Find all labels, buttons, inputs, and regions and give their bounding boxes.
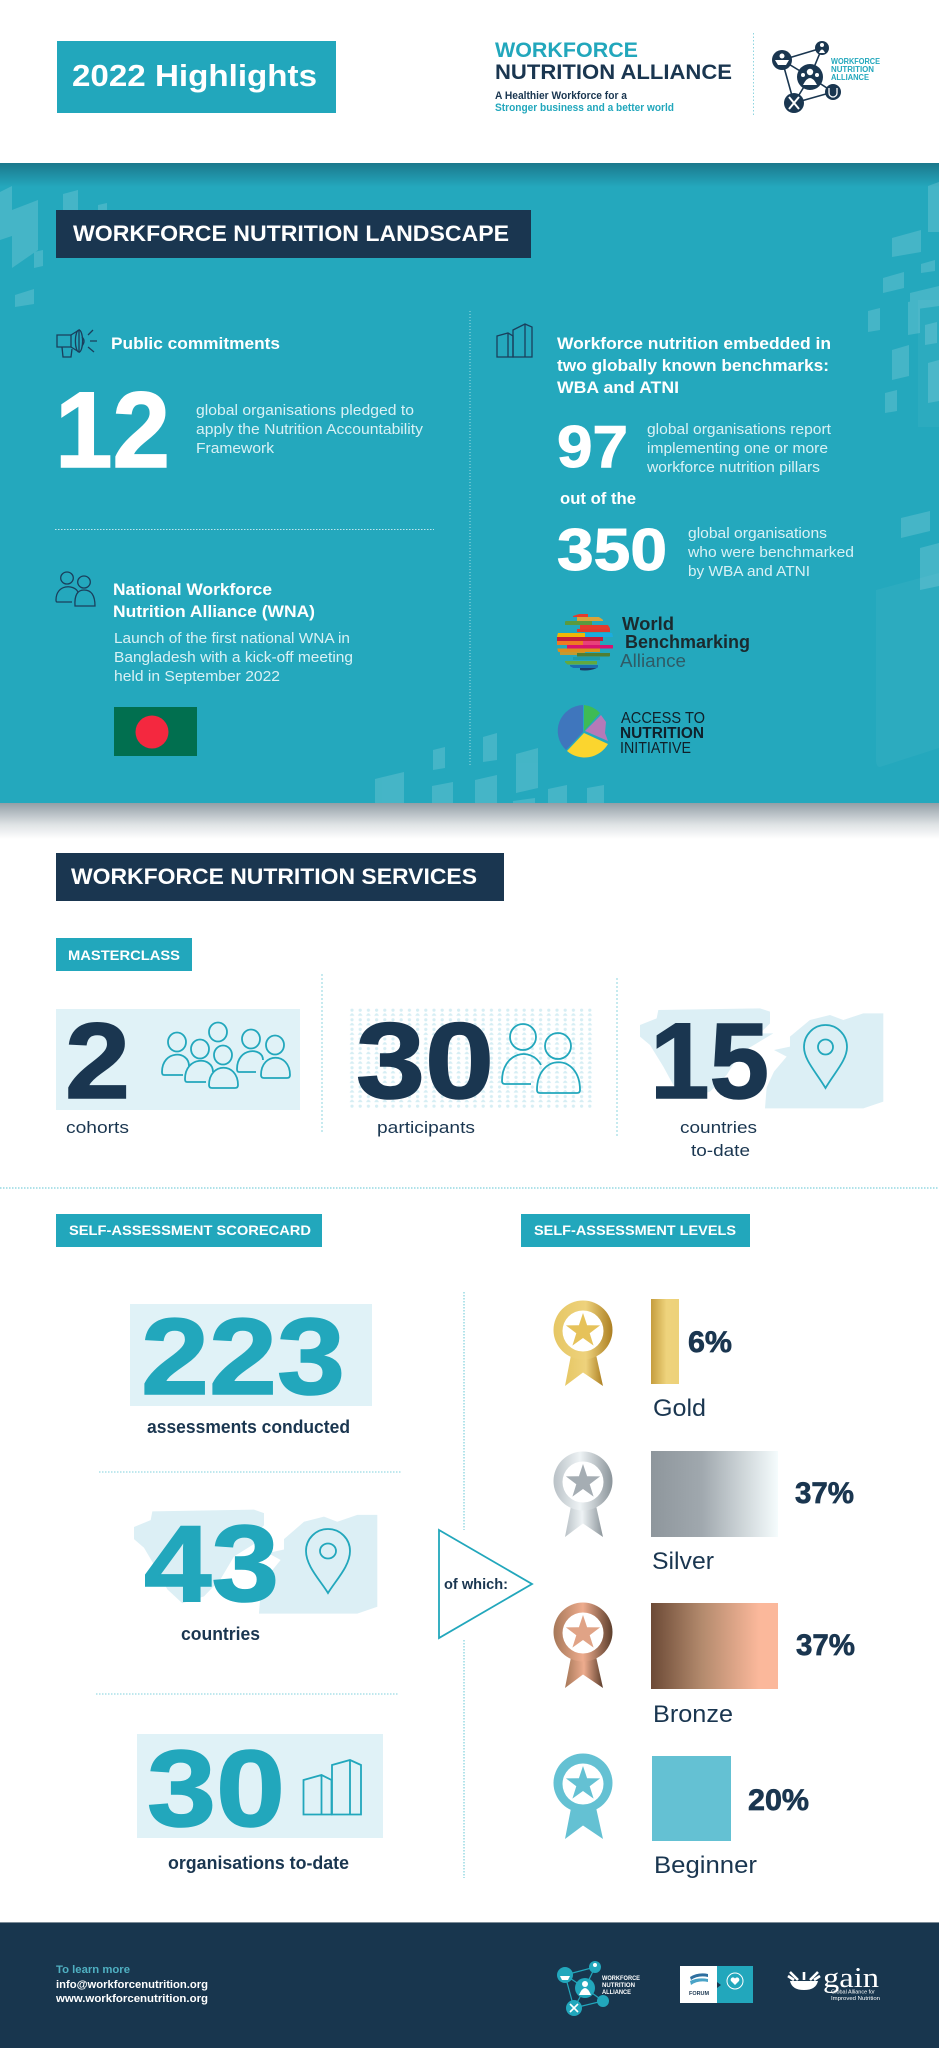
text: WNA launch <box>114 631 353 685</box>
stat card: 15 countries <box>640 1000 883 1160</box>
logo: Access to Nutrition Initiative <box>558 705 705 758</box>
heading: benchmarks: two globally known benchmarks: <box>557 356 829 375</box>
icon: megaphone <box>57 330 97 357</box>
arrow: of which: of which: <box>444 1576 508 1593</box>
icon: Bangladesh flag <box>114 707 197 756</box>
heading: national WNA: Nutrition Alliance (WNA) <box>113 602 315 621</box>
stat card: 15 countries: 15 <box>650 1000 769 1121</box>
stat card: 15 countries: countries <box>680 1118 757 1137</box>
heading: national WNA <box>113 580 315 621</box>
logo: Workforce Nutrition Alliance wordmark: A Healthier Workforce for a <box>495 90 628 102</box>
logo: Access to Nutrition Initiative: INITIATIVE <box>620 740 691 757</box>
text: 350 description: by WBA and ATNI <box>688 564 810 580</box>
level: beginner: Beginner <box>654 1852 757 1879</box>
heading: benchmarks <box>557 334 831 397</box>
text: contact <box>55 1964 208 2005</box>
text: pledged organisations <box>196 403 424 457</box>
arrow: of which <box>439 1530 532 1638</box>
text: 350 description: who were benchmarked <box>687 545 854 561</box>
level: silver <box>554 1451 854 1575</box>
stat: 43 countries: 43 <box>144 1503 279 1625</box>
text: 97 description: implementing one or more <box>647 441 828 457</box>
stat: 350: 350 <box>557 517 667 583</box>
label: self-assessment levels <box>521 1214 750 1247</box>
world map <box>640 1008 883 1108</box>
text: contact: info@workforcenutrition.org <box>56 1979 208 1991</box>
stat: 97: 97 <box>557 414 628 480</box>
logo: forum partner badge <box>680 1966 753 2003</box>
header: 2022 Highlights badge <box>57 41 336 113</box>
logo: World Benchmarking Alliance: Benchmarking <box>625 632 750 652</box>
heading: benchmarks: Workforce nutrition embedded in <box>557 334 831 353</box>
icon: gold medal <box>554 1300 612 1386</box>
logo: network icon <box>772 41 881 113</box>
stat card: 15 countries: to-date <box>691 1141 750 1160</box>
icon: location pin <box>804 1025 847 1088</box>
heading: workforce nutrition landscape <box>56 210 531 258</box>
stat: 30 organisations: organisations to-date <box>168 1853 349 1873</box>
logo: GAIN <box>788 1963 880 2002</box>
text: WNA launch: Bangladesh with a kick-off meeting <box>114 650 353 666</box>
label: masterclass: MASTERCLASS <box>68 947 180 963</box>
stat card: 2 cohorts <box>56 1000 300 1137</box>
icon: silver medal <box>554 1452 612 1537</box>
header: 2022 Highlights badge: 2022 Highlights <box>72 58 317 93</box>
panel: workforce nutrition landscape <box>0 163 939 839</box>
text: out of the: out of the <box>560 489 636 508</box>
label: self-assessment scorecard <box>56 1214 322 1247</box>
logo: Access to Nutrition Initiative: ACCESS TO <box>621 710 705 727</box>
heading: public commitments: Public commitments <box>111 334 280 353</box>
text: contact: To learn more <box>56 1964 130 1976</box>
text: 350 description: global organisations <box>688 526 827 542</box>
label: self-assessment levels: SELF-ASSESSMENT LEVELS <box>534 1222 736 1238</box>
heading: workforce nutrition services <box>56 853 504 901</box>
label: self-assessment scorecard: SELF-ASSESSMENT SCORECARD <box>69 1222 311 1238</box>
stat card: 30 participants: 30 <box>356 1000 494 1121</box>
stat: 223 assessments: 223 <box>141 1296 345 1418</box>
stat: 30 organisations <box>137 1728 383 1873</box>
level: beginner <box>554 1754 809 1879</box>
world map <box>134 1510 377 1614</box>
stat card: 2 cohorts: 2 <box>65 1000 130 1121</box>
icon: buildings <box>497 324 532 357</box>
icon: bronze medal <box>554 1602 612 1688</box>
icon: two people outline <box>502 1024 580 1093</box>
level: silver: 37% <box>795 1477 854 1510</box>
text: 97 description: workforce nutrition pillars <box>646 460 820 476</box>
logo: network icon, footer: ALLIANCE <box>602 1989 632 1996</box>
logo: World Benchmarking Alliance: World <box>622 614 674 634</box>
text: 97 description <box>646 422 831 476</box>
stat: 43 countries: countries <box>181 1624 260 1644</box>
text: WNA launch: Launch of the first national WNA in <box>114 631 350 647</box>
stat: 12: 12 <box>55 369 170 490</box>
logo: network icon: NUTRITION <box>831 65 874 74</box>
level: gold: Gold <box>653 1395 706 1422</box>
heading: workforce nutrition services: WORKFORCE NUTRITION SERVICES <box>71 864 477 889</box>
text: pledged organisations: apply the Nutrition Accountability <box>196 422 424 438</box>
text: WNA launch: held in September 2022 <box>114 669 280 685</box>
logo: GAIN: gain <box>823 1963 879 1994</box>
logo: network icon, footer: NUTRITION <box>602 1982 635 1989</box>
stat: 30 organisations: 30 <box>147 1728 285 1850</box>
level: bronze: Bronze <box>653 1701 733 1728</box>
icon: beginner medal <box>554 1754 612 1839</box>
logo: network icon, footer <box>557 1961 641 2016</box>
text: 97 description: global organisations report <box>647 422 831 438</box>
logo: forum partner badge: FORUM <box>689 1991 709 1997</box>
logo: Workforce Nutrition Alliance wordmark: NUTRITION ALLIANCE <box>495 60 732 84</box>
level: beginner: 20% <box>748 1784 809 1817</box>
logo: GAIN: Improved Nutrition <box>831 1996 880 2002</box>
text: pledged organisations: global organisations pledged to <box>196 403 414 419</box>
text: pledged organisations: Framework <box>196 441 275 457</box>
footer <box>0 1922 939 2048</box>
icon: group of people <box>162 1022 290 1088</box>
text: contact: www.workforcenutrition.org <box>55 1993 208 2005</box>
logo: Workforce Nutrition Alliance wordmark <box>495 38 732 114</box>
stat: 43 countries <box>134 1503 377 1644</box>
level: bronze <box>554 1602 855 1728</box>
icon: buildings <box>304 1760 361 1814</box>
stat card: 2 cohorts: cohorts <box>66 1118 129 1137</box>
label: masterclass <box>56 938 192 971</box>
logo: Workforce Nutrition Alliance wordmark: WORKFORCE <box>495 38 638 62</box>
heading: benchmarks: WBA and ATNI <box>557 378 679 397</box>
logo: network icon, footer: WORKFORCE <box>602 1975 641 1982</box>
logo: Access to Nutrition Initiative: NUTRITION <box>620 725 704 742</box>
level: gold: 6% <box>688 1326 732 1359</box>
stat card: 30 participants <box>348 1000 594 1137</box>
heading: workforce nutrition landscape: WORKFORCE NUTRITION LANDSCAPE <box>73 221 509 246</box>
logo: Workforce Nutrition Alliance wordmark: Stronger business and a better world <box>495 102 674 114</box>
logo: World Benchmarking Alliance <box>557 614 750 671</box>
heading: national WNA: National Workforce <box>113 580 272 599</box>
stat: 223 assessments: assessments conducted <box>147 1417 350 1437</box>
icon: two people <box>56 572 95 606</box>
logo: network icon: WORKFORCE <box>831 57 881 66</box>
stat: 223 assessments <box>130 1296 372 1437</box>
icon: location pin <box>306 1529 350 1593</box>
logo: World Benchmarking Alliance: Alliance <box>620 651 686 671</box>
logo: GAIN: Global Alliance for <box>831 1990 875 1996</box>
level: gold <box>554 1299 732 1422</box>
level: silver: Silver <box>652 1548 714 1575</box>
text: 350 description <box>687 526 854 580</box>
level: bronze: 37% <box>796 1629 855 1662</box>
logo: network icon: ALLIANCE <box>831 73 870 82</box>
stat card: 30 participants: participants <box>377 1118 475 1137</box>
